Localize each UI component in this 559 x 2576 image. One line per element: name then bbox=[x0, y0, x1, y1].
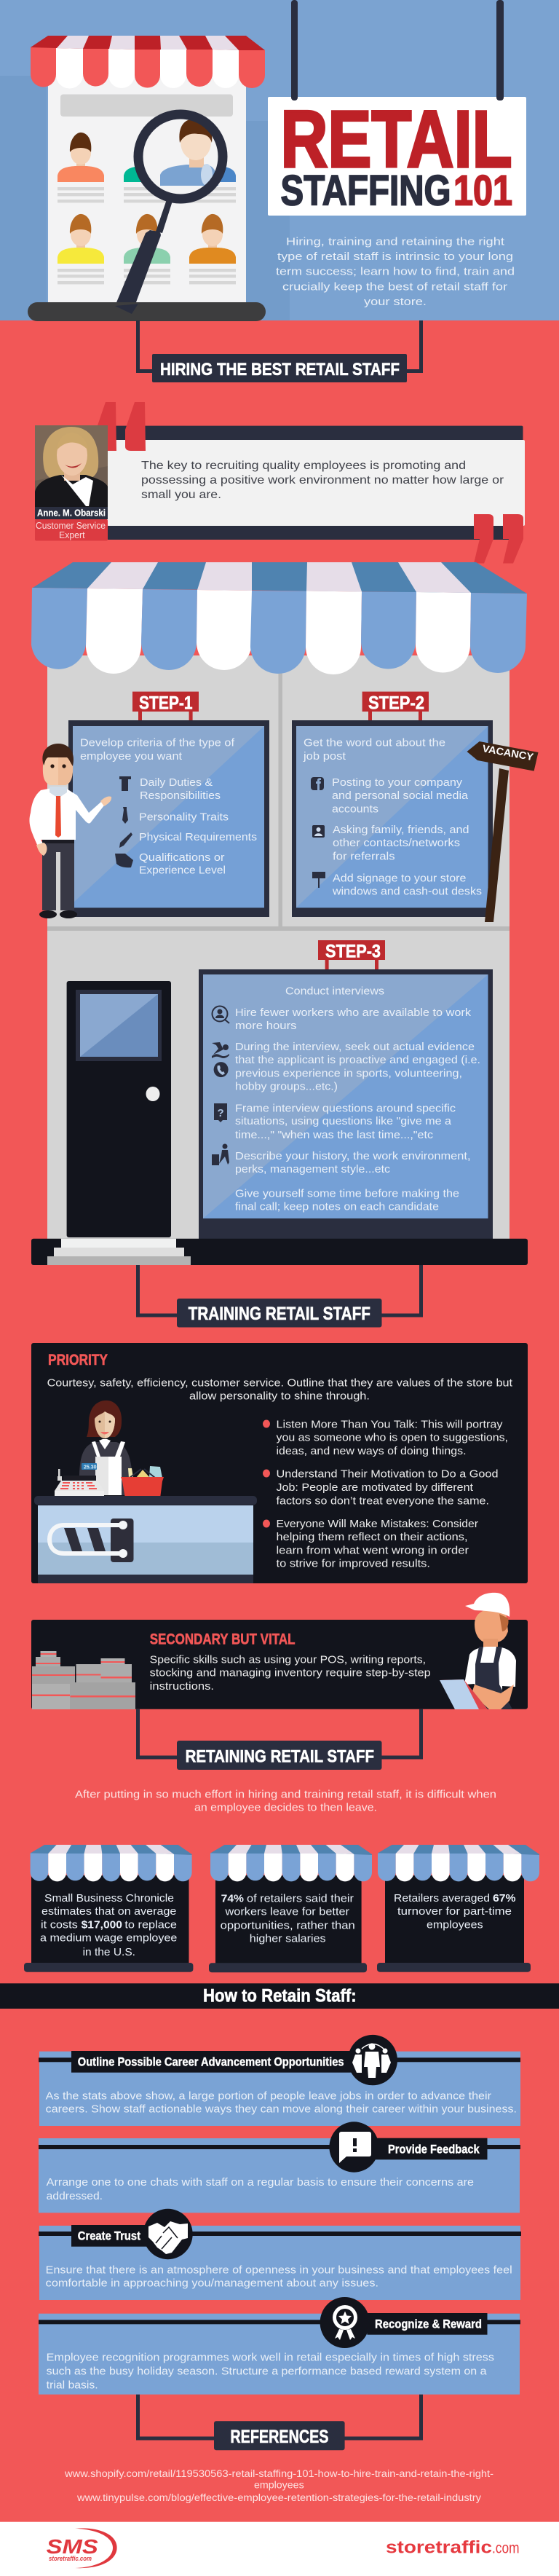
step 2 text: Add signage to your store bbox=[333, 873, 466, 885]
trust text bbox=[46, 2264, 512, 2289]
step 3 text: Conduct interviews bbox=[285, 985, 384, 998]
reward text: trial basis. bbox=[47, 2379, 98, 2391]
quote text: possessing a positive work environment no matter how large or bbox=[141, 474, 504, 487]
step 1 text: Experience Level bbox=[139, 864, 226, 877]
icon: question bubble: ? bbox=[217, 1107, 224, 1119]
stat card: replacement cost: Small Business Chronicle bbox=[44, 1892, 174, 1905]
name plate: Anne. M. Obarski bbox=[37, 507, 106, 519]
reference links: employees bbox=[254, 2480, 304, 2491]
band: how to retain staff bbox=[0, 1983, 559, 2009]
step 2 text: for referrals bbox=[333, 851, 395, 863]
cashier illustration bbox=[55, 1401, 164, 1499]
icon: facebook bbox=[311, 777, 324, 790]
step 2 text: other contacts/networks bbox=[333, 837, 460, 849]
icon: pencil bbox=[119, 832, 132, 848]
step 2 text: windows and cash-out desks bbox=[332, 886, 482, 898]
portrait of Anne M. Obarski bbox=[35, 425, 108, 507]
intro text: Hiring, training and retaining the right bbox=[286, 236, 505, 248]
icon: person search bbox=[213, 1007, 229, 1023]
step 3 text: During the interview, seek out actual evidence bbox=[235, 1041, 475, 1053]
panel: create trust bbox=[39, 2209, 521, 2300]
step 2 sign bbox=[362, 692, 429, 721]
step 2 text: Asking family, friends, and bbox=[333, 824, 469, 836]
step 3 text: final call; keep notes on each candidate bbox=[235, 1200, 439, 1213]
presenter man illustration bbox=[29, 744, 111, 918]
stat card: replacement cost: in the U.S. bbox=[83, 1946, 135, 1958]
trust text: Ensure that there is an atmosphere of openness in your business and that employees feel bbox=[46, 2264, 512, 2277]
worker illustration bbox=[440, 1593, 516, 1709]
step 1 text: Personality Traits bbox=[139, 811, 229, 823]
step 2 text: job post bbox=[303, 750, 346, 763]
icon: question bubble bbox=[214, 1103, 227, 1122]
storetraffic wordmark: storetraffic bbox=[386, 2538, 492, 2558]
stat card: replacement cost bbox=[24, 1845, 193, 1972]
icon: phone bubble bbox=[214, 1062, 229, 1077]
step 3 text: Frame interview questions around specific bbox=[235, 1102, 456, 1114]
heading: hiring the best retail staff: HIRING THE BEST RETAIL STAFF bbox=[160, 360, 400, 379]
panel: step 2 bbox=[292, 692, 493, 917]
priority bullet list: Job: People are motivated by different bbox=[277, 1481, 474, 1494]
secondary heading: SECONDARY BUT VITAL bbox=[150, 1630, 296, 1647]
feedback text: Arrange one to one chats with staff on a regular basis to ensure their concerns are bbox=[47, 2176, 474, 2189]
hero panel bbox=[0, 0, 559, 321]
intro text: your store. bbox=[364, 296, 427, 308]
stacked boxes illustration bbox=[32, 1651, 135, 1709]
stat card: replacement cost: $17,000 bbox=[82, 1918, 122, 1931]
door bbox=[67, 981, 171, 1237]
panel: secondary but vital bbox=[31, 1593, 528, 1709]
background city silhouette bbox=[0, 76, 290, 320]
icon: signpost bbox=[312, 872, 325, 888]
secondary text: instructions. bbox=[150, 1680, 214, 1693]
stat card: better opportunities: opportunities, rather than bbox=[221, 1919, 355, 1931]
step 1 text: employee you want bbox=[80, 750, 183, 763]
panel: expert quote bbox=[35, 402, 525, 564]
career text: careers. Show staff actionable ways they can move along their career within your business. bbox=[46, 2103, 517, 2116]
priority bullet list: Understand Their Motivation to Do a Good bbox=[277, 1468, 498, 1481]
priority bullet list: ideas, and new ways of doing things. bbox=[277, 1445, 466, 1457]
job title plate bbox=[35, 519, 108, 540]
stat card: part-time turnover bbox=[377, 1845, 539, 1972]
quote text: small you are. bbox=[141, 489, 221, 501]
title sign bbox=[268, 0, 526, 216]
priority bullet list bbox=[263, 1419, 508, 1569]
reference links: www.tinypulse.com/blog/effective-employee-retention-strategies-for-the-retail-industry bbox=[76, 2492, 481, 2503]
shop base bbox=[28, 302, 266, 321]
stat card: replacement cost: it costs bbox=[41, 1918, 78, 1931]
step 2 text: Posting to your company bbox=[332, 776, 463, 789]
big blue awning bbox=[31, 562, 527, 674]
panel: create trust: Create Trust bbox=[78, 2229, 140, 2243]
shopping basket bbox=[121, 1466, 164, 1498]
panel: step 1 bbox=[68, 692, 269, 917]
quote text: The key to recruiting quality employees is promoting and bbox=[141, 460, 466, 472]
shop awning bbox=[31, 36, 265, 89]
retaining intro text: After putting in so much effort in hiring and training retail staff, it is difficult when bbox=[75, 1788, 496, 1800]
icon: graduation cap bbox=[115, 854, 133, 867]
reference links: www.shopify.com/retail/119530563-retail-staffing-101-how-to-hire-train-and-retain-the-right- bbox=[64, 2468, 493, 2479]
title sign: STAFFING bbox=[281, 168, 451, 214]
trust text: comfortable in approaching you/management about any issues. bbox=[46, 2277, 378, 2289]
checkout counter bbox=[34, 1496, 257, 1583]
step 2 text: and personal social media bbox=[332, 789, 469, 802]
stat card: part-time turnover: employees bbox=[427, 1919, 483, 1931]
step 1 text: Develop criteria of the type of bbox=[80, 737, 235, 749]
career text bbox=[46, 2089, 517, 2116]
panel: recognize and reward: Recognize & Reward bbox=[375, 2317, 482, 2331]
feedback text bbox=[47, 2176, 474, 2202]
step 3 text: more hours bbox=[235, 1020, 297, 1032]
icon: clipboard duties bbox=[119, 776, 131, 791]
priority intro text: Courtesy, safety, efficiency, customer service. Outline that they are values of the store but bbox=[47, 1377, 513, 1390]
stat card: better opportunities: workers leave for better bbox=[224, 1906, 349, 1918]
icon: contact card bbox=[312, 825, 325, 838]
title sign: RETAIL bbox=[281, 95, 512, 184]
step 3 text: Hire fewer workers who are available to work bbox=[235, 1007, 472, 1019]
priority bullet list: Everyone Will Make Mistakes: Consider bbox=[277, 1518, 478, 1530]
heading: training retail staff bbox=[138, 1265, 421, 1327]
store base and door steps bbox=[31, 1239, 528, 1265]
step 3 text: that the applicant is proactive and engaged (i.e. bbox=[235, 1054, 480, 1066]
SMS logo: SMS bbox=[47, 2535, 98, 2558]
step 3 sign bbox=[318, 940, 385, 970]
reward text: such as the busy holiday season. Structure a performance based reward system on a bbox=[47, 2366, 487, 2378]
feedback text: addressed. bbox=[47, 2190, 103, 2202]
footer bbox=[0, 2522, 559, 2576]
panel: provide feedback bbox=[39, 2122, 520, 2213]
step 3 text: previous experience in sports, volunteering, bbox=[235, 1068, 462, 1080]
step 1 text bbox=[80, 737, 257, 877]
secondary text bbox=[150, 1653, 431, 1693]
step 1 text: Qualifications or bbox=[139, 851, 224, 864]
secondary text: Specific skills such as using your POS, writing reports, bbox=[150, 1653, 426, 1666]
icon: swimmer bbox=[212, 1042, 229, 1058]
reward text bbox=[47, 2352, 494, 2391]
vacancy sign bbox=[467, 741, 539, 922]
stat card: better opportunities: of retailers said their bbox=[247, 1893, 354, 1905]
title sign: 101 bbox=[453, 168, 512, 214]
panel: career advancement bbox=[39, 2035, 520, 2126]
panel: career advancement: Outline Possible Career Advancement Opportunities bbox=[78, 2055, 344, 2068]
stat card: replacement cost: to replace bbox=[124, 1918, 177, 1931]
cash register: 25.30 bbox=[84, 1465, 97, 1470]
cash register bbox=[55, 1463, 104, 1499]
step 3 text: Give yourself some time before making the bbox=[235, 1188, 459, 1200]
step 3 text: time...," "when was the last time...,"etc bbox=[235, 1129, 434, 1141]
heading: training retail staff: TRAINING RETAIL STAFF bbox=[189, 1304, 370, 1324]
icon: award rosette bbox=[320, 2297, 370, 2348]
step 2 text: accounts bbox=[332, 803, 378, 816]
step 3 window bbox=[199, 969, 493, 1239]
step 1 text: Responsibilities bbox=[140, 789, 221, 802]
step 1 text: Daily Duties & bbox=[140, 776, 213, 789]
step 3 text: hobby groups...etc.) bbox=[235, 1080, 338, 1092]
icon: necktie bbox=[122, 807, 128, 824]
step 3 text: Describe your history, the work environment, bbox=[235, 1150, 470, 1162]
quote text bbox=[141, 460, 504, 501]
step 1 window bbox=[68, 720, 269, 917]
step 3 text: situations, using questions like "give me a bbox=[235, 1115, 452, 1127]
stat card: better opportunities bbox=[209, 1845, 372, 1972]
step 3 sign: STEP-3 bbox=[325, 941, 381, 961]
panel: provide feedback: Provide Feedback bbox=[388, 2142, 480, 2156]
heading: hiring the best retail staff bbox=[138, 320, 421, 382]
stat card: better opportunities: 74% bbox=[221, 1893, 244, 1905]
panel: step 3 bbox=[199, 940, 493, 1239]
icon: three people bbox=[348, 2035, 397, 2085]
step 2 text: Get the word out about the bbox=[304, 737, 445, 749]
stat card: part-time turnover: Retailers averaged bbox=[394, 1892, 490, 1905]
retaining intro text bbox=[75, 1788, 496, 1814]
icon: alert speech bubble bbox=[329, 2122, 378, 2173]
stat card: part-time turnover: 67% bbox=[493, 1892, 516, 1905]
priority bullet list: learn from what went wrong in order bbox=[277, 1545, 469, 1557]
step 3 text: perks, management style...etc bbox=[235, 1163, 391, 1175]
SMS logo bbox=[47, 2528, 117, 2568]
step 2 sign: STEP-2 bbox=[368, 693, 424, 714]
intro text: term success; learn how to find, train and bbox=[276, 265, 515, 277]
step 2 window bbox=[292, 720, 493, 917]
priority heading: PRIORITY bbox=[48, 1352, 108, 1368]
job title plate: Expert bbox=[59, 530, 85, 540]
stat card: replacement cost: a medium wage employee bbox=[40, 1932, 177, 1945]
storetraffic wordmark: .com bbox=[492, 2540, 520, 2557]
icon: handshake bbox=[143, 2209, 193, 2259]
heading: retaining retail staff: RETAINING RETAIL STAFF bbox=[186, 1746, 374, 1766]
heading: retaining retail staff bbox=[138, 1709, 421, 1770]
icon: person at desk bbox=[212, 1143, 229, 1165]
step 1 sign: STEP-1 bbox=[139, 693, 193, 714]
stat card: better opportunities: higher salaries bbox=[250, 1933, 326, 1945]
step 1 sign bbox=[132, 692, 199, 721]
retaining intro text: an employee decides to then leave. bbox=[194, 1802, 377, 1814]
priority bullet list: you as someone who is open to suggestions, bbox=[277, 1432, 508, 1444]
priority intro text bbox=[47, 1377, 513, 1402]
priority bullet list: helping them reflect on their actions, bbox=[277, 1531, 467, 1543]
career text: As the stats above show, a large portion of people leave jobs in order to advance their bbox=[46, 2089, 491, 2102]
intro text: crucially keep the best of retail staff for bbox=[282, 281, 507, 293]
secondary text: stocking and managing inventory require step-by-step bbox=[150, 1666, 431, 1679]
vacancy sign: VACANCY bbox=[481, 742, 535, 763]
intro text: type of retail staff is intrinsic to your long bbox=[277, 251, 513, 263]
closing quote mark bbox=[474, 514, 523, 564]
shop illustration with candidates bbox=[28, 36, 266, 321]
priority bullet list: Listen More Than You Talk: This will portray bbox=[277, 1419, 503, 1431]
priority intro text: allow personality to shine through. bbox=[189, 1390, 370, 1402]
priority bullet list: to strive for improved results. bbox=[277, 1557, 430, 1569]
stat card: replacement cost: estimates that on average bbox=[41, 1905, 176, 1918]
step 3 text bbox=[235, 985, 480, 1213]
heading: references bbox=[138, 2395, 421, 2450]
storetraffic wordmark bbox=[386, 2538, 520, 2558]
reward text: Employee recognition programmes work well in retail especially in times of high stress bbox=[47, 2352, 494, 2364]
opening quote mark bbox=[96, 402, 146, 451]
job title plate: Customer Service bbox=[36, 521, 106, 531]
store building bbox=[47, 655, 510, 1239]
reference links bbox=[64, 2468, 493, 2503]
step 1 text: Physical Requirements bbox=[139, 831, 257, 843]
magnifying glass bbox=[115, 114, 223, 314]
panel: priority bbox=[31, 1343, 528, 1583]
step 2 text bbox=[303, 737, 482, 898]
priority bullet list: factors so don’t treat everyone the same. bbox=[277, 1495, 489, 1508]
panel: recognize and reward bbox=[39, 2297, 520, 2395]
band: how to retain staff: How to Retain Staff: bbox=[203, 1985, 357, 2006]
intro text bbox=[276, 236, 515, 308]
heading: references: REFERENCES bbox=[230, 2427, 329, 2447]
stat card: part-time turnover: turnover for part-time bbox=[397, 1905, 512, 1918]
SMS logo: storetraffic.com bbox=[49, 2555, 92, 2562]
